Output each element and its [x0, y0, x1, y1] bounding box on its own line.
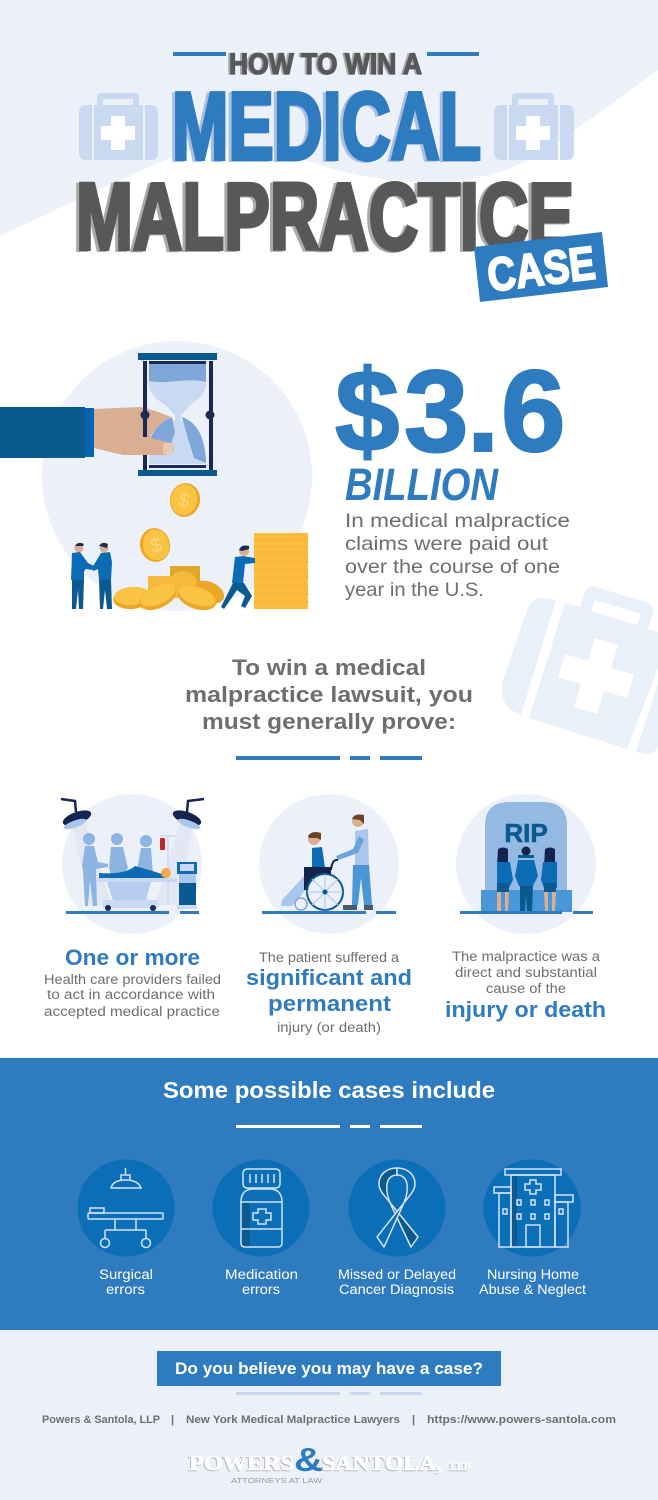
panel text: Health care providers failed — [44, 972, 221, 987]
logo: LLP — [450, 1462, 471, 1472]
icon: coin pile — [112, 566, 228, 615]
big number: 6 — [501, 346, 566, 476]
stat description: claims were paid out — [345, 533, 549, 555]
icon: medication bottle — [212, 1160, 310, 1256]
stat description: In medical malpractice — [345, 510, 570, 532]
panel text: to act in accordance with — [47, 987, 215, 1002]
label: cancer diagnosis: Cancer Diagnosis — [339, 1282, 454, 1297]
billion label: BILLION — [345, 459, 499, 510]
heading: to win a lawsuit: malpractice lawsuit, you — [185, 682, 473, 707]
panel text: injury (or death) — [277, 1020, 381, 1035]
icon: stack of money — [253, 533, 309, 609]
label: medication errors: errors — [242, 1282, 280, 1297]
panel heading: One or more — [65, 945, 200, 970]
label: cancer diagnosis: Missed or Delayed — [338, 1267, 456, 1282]
title rule left — [173, 52, 226, 56]
case badge: CASE — [484, 236, 598, 301]
label: cancer diagnosis — [338, 1267, 456, 1297]
label: nursing home — [479, 1267, 586, 1297]
panel text: The patient suffered a — [259, 950, 400, 965]
panel text — [452, 949, 601, 996]
logo: SANTOLA, — [322, 1451, 442, 1475]
icon: falling coin: $ — [176, 489, 192, 513]
panel emphasis: permanent — [268, 991, 392, 1016]
icon: falling coin — [167, 480, 203, 520]
footer links: New York Medical Malpractice Lawyers — [186, 1414, 400, 1426]
stat description: year in the U.S. — [345, 579, 484, 601]
stat description: over the course of one — [345, 556, 560, 578]
big number: . — [467, 346, 499, 476]
big number: $ — [335, 346, 400, 476]
illustration: wheelchair — [259, 794, 399, 934]
call to action: Do you believe you may have a case? — [175, 1360, 483, 1378]
label: surgical errors: Surgical — [99, 1267, 153, 1282]
logo: ATTORNEYS AT LAW — [231, 1476, 323, 1485]
label: surgical errors — [99, 1267, 153, 1297]
panel: one or more — [44, 794, 221, 1019]
icon: awareness ribbon — [348, 1160, 446, 1256]
stat description — [345, 510, 570, 601]
panel text — [44, 972, 221, 1019]
stat: $3.6 billion — [335, 346, 570, 601]
panel: possible cases — [0, 1058, 658, 1330]
logo: POWERS — [189, 1451, 294, 1475]
footer links: | — [171, 1414, 174, 1426]
illustration: gravestone — [456, 794, 596, 934]
footer links — [42, 1414, 616, 1426]
panel text: direct and substantial — [455, 965, 597, 980]
label: medication errors — [225, 1267, 298, 1297]
icon: surgical table — [78, 1160, 174, 1256]
panel: footer — [0, 1330, 658, 1500]
panel text: The malpractice was a — [452, 949, 601, 964]
panel heading: Some possible cases include — [163, 1077, 495, 1103]
icon: large faded medical kit — [502, 587, 658, 754]
icon: hourglass — [138, 353, 217, 476]
icon: medical kit left — [79, 93, 158, 160]
illustration: gravestone: RIP — [504, 818, 548, 848]
footer links: | — [412, 1414, 415, 1426]
title rule right — [427, 52, 479, 56]
label: medication errors: Medication — [225, 1267, 298, 1282]
logo — [189, 1441, 471, 1485]
label: nursing home: Nursing Home — [487, 1267, 579, 1282]
icon: falling coin — [137, 525, 173, 565]
title line: how to win a: HOW TO WIN A — [229, 48, 422, 81]
panel text: accepted medical practice — [44, 1004, 220, 1019]
heading: to win a lawsuit: must generally prove: — [202, 709, 456, 734]
figure: businessman right — [92, 543, 112, 609]
call to action — [157, 1351, 501, 1386]
illustration: operating room — [61, 794, 204, 934]
panel text: cause of the — [486, 981, 566, 996]
heading: to win a lawsuit — [185, 655, 473, 734]
icon: falling coin: $ — [148, 534, 164, 558]
panel emphasis: significant and — [246, 965, 412, 990]
title — [76, 48, 608, 302]
illustration: hourglass and coins — [0, 341, 312, 615]
footer links: Powers & Santola, LLP — [42, 1414, 160, 1426]
title line: medical: MEDICAL — [172, 73, 481, 180]
figure: businessman pushing — [221, 546, 255, 609]
label: nursing home: Abuse & Neglect — [479, 1282, 586, 1297]
footer links: https://www.powers-santola.com — [427, 1414, 616, 1426]
panel: injury or death — [445, 794, 606, 1022]
panel: significant and permanent — [246, 794, 412, 1035]
icon: medical kit right — [494, 93, 574, 160]
heading: to win a lawsuit: To win a medical — [232, 655, 426, 680]
icon: hand and sleeve — [0, 361, 214, 458]
logo: & — [294, 1441, 323, 1478]
icon: hospital — [484, 1160, 580, 1256]
big number: 3 — [404, 346, 469, 476]
label: surgical errors: errors — [106, 1282, 145, 1297]
background circle — [42, 341, 312, 611]
figure: businessman left — [71, 543, 94, 609]
panel emphasis: injury or death — [445, 997, 606, 1022]
panel emphasis — [246, 965, 412, 1016]
